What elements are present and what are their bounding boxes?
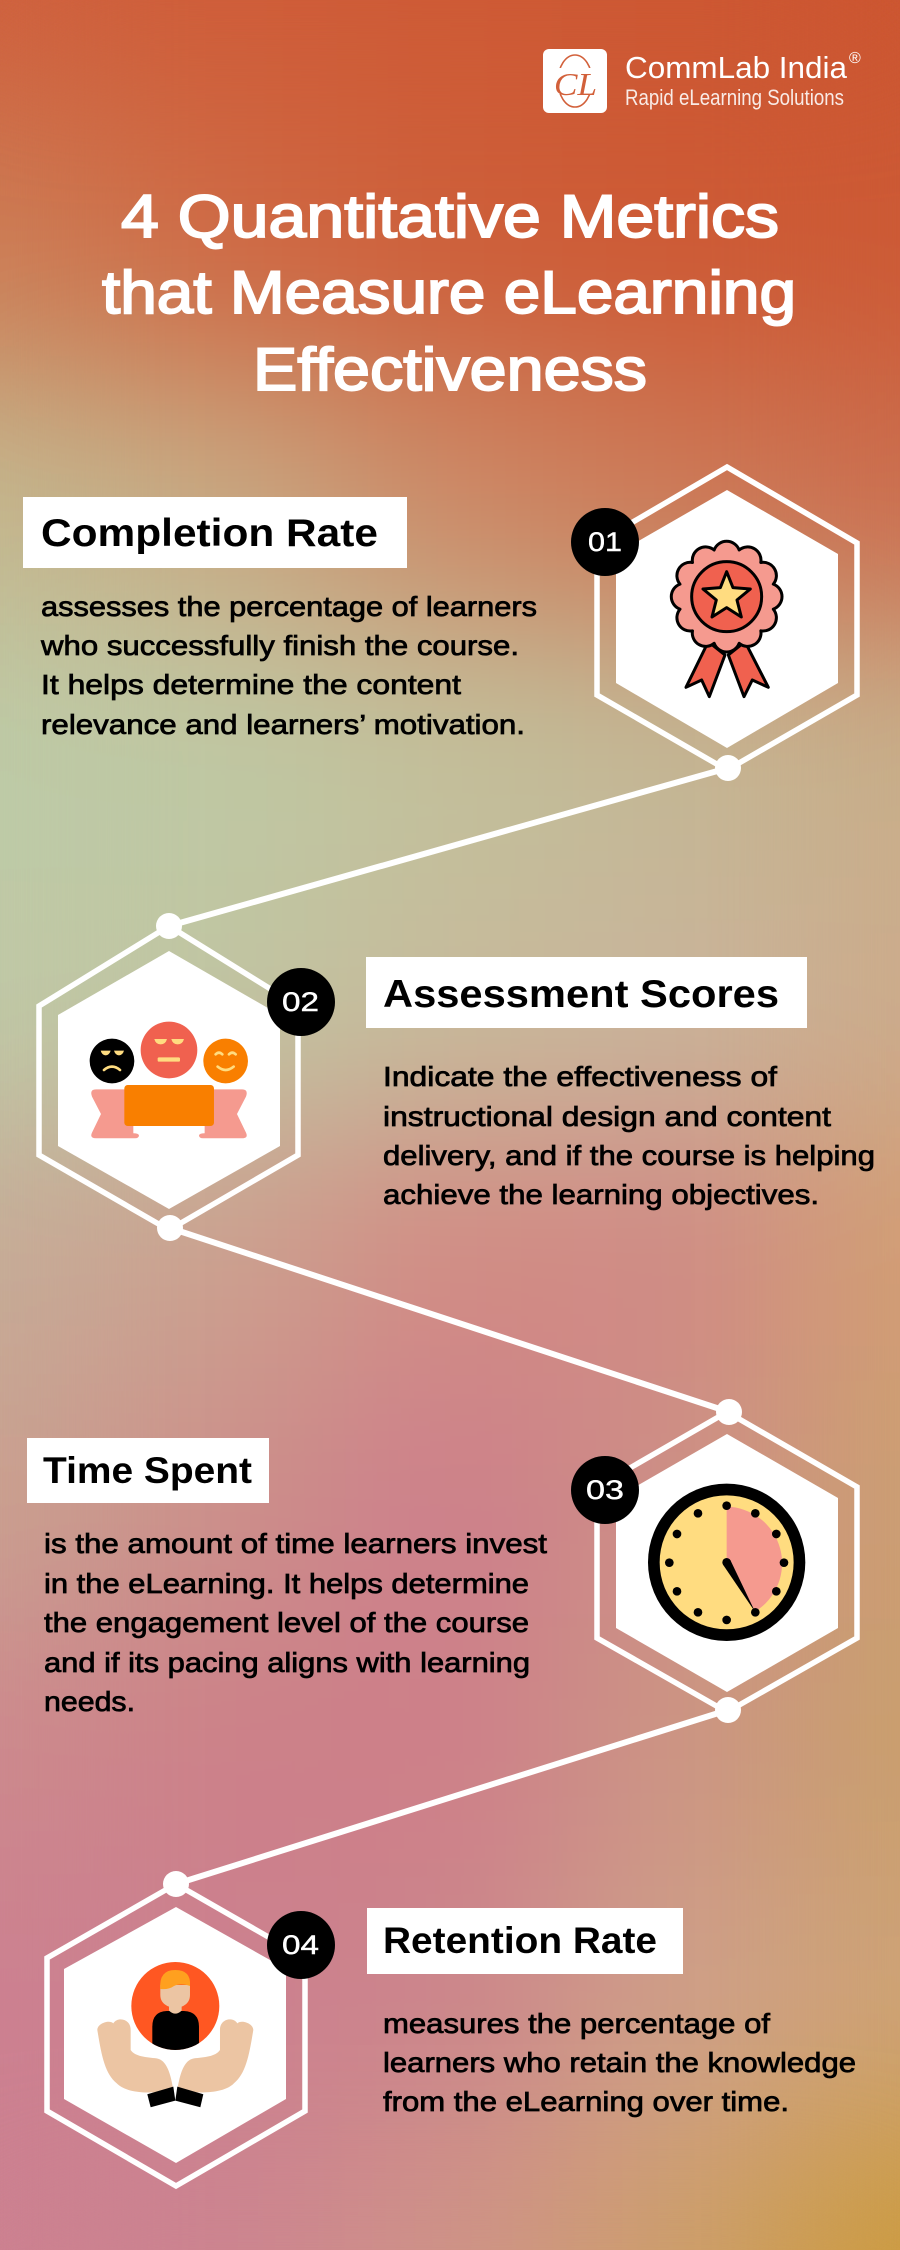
heading: retention rate: Retention Rate [383,1920,657,1961]
icon: hexagon with award rosette [597,467,857,781]
heading: time spent [27,1438,269,1503]
text: completion rate description: It helps determine the content [41,669,461,700]
title: 4 Quantitative Metrics [121,183,779,250]
title: Effectiveness [253,336,647,403]
text: assessment scores description: achieve the learning objectives. [383,1179,819,1210]
heading: retention rate [367,1908,683,1974]
text: completion rate description: who successfully finish the course. [40,630,519,661]
arrow: connector 2 to 3 [170,1228,729,1412]
badge: 02 [267,968,335,1036]
panel: assessment scores [39,913,875,1241]
text: time spent description: and if its pacing aligns with learning [44,1647,530,1678]
panel: completion rate [23,467,857,781]
logo tagline: Rapid eLearning Solutions [625,85,844,110]
badge: 03 [571,1456,639,1524]
heading: assessment scores: Assessment Scores [383,973,779,1016]
text: assessment scores description: instructional design and content [383,1101,831,1132]
badge: 04 [267,1911,335,1979]
text: assessment scores description [383,1061,875,1210]
icon: award rosette [671,541,782,697]
heading: completion rate [23,497,407,568]
text: retention rate description: measures the percentage of [383,2008,770,2039]
text: time spent description: in the eLearning. It helps determine [44,1568,529,1599]
text: completion rate description [40,591,537,740]
icon: CL logo mark: CL [554,66,597,102]
text: retention rate description: learners who retain the knowledge [383,2047,856,2078]
panel: time spent [27,1399,857,1723]
text: retention rate description: from the eLearning over time. [383,2086,789,2117]
arrow: connector 1 to 2 [169,768,728,926]
text: time spent description [44,1528,547,1717]
icon: CL logo mark [543,49,607,113]
badge: 04: 04 [282,1930,319,1960]
badge: 03: 03 [586,1475,624,1505]
icon: hexagon with person in hands [47,1871,305,2186]
icon: feedback faces on ribbon [90,1022,248,1138]
text: retention rate description [383,2008,856,2117]
badge: 01 [571,508,639,576]
text: time spent description: the engagement level of the course [44,1607,529,1638]
icon: hexagon with clock [597,1399,857,1723]
logo wordmark: CommLab India [625,50,848,85]
heading: completion rate: Completion Rate [41,512,378,555]
text: time spent description: needs. [44,1686,135,1717]
title [102,183,796,403]
arrow: connector 3 to 4 [176,1710,728,1884]
icon: hexagon with feedback faces [39,913,298,1241]
badge: 01: 01 [588,527,622,557]
heading: assessment scores [366,957,807,1028]
text: time spent description: is the amount of time learners invest [44,1528,547,1559]
registered mark: ® [849,50,861,67]
text: assessment scores description: Indicate the effectiveness of [383,1061,777,1092]
logo: CommLab India [543,49,861,113]
text: completion rate description: relevance and learners’ motivation. [41,709,525,740]
title: that Measure eLearning [102,259,796,326]
heading: time spent: Time Spent [43,1450,252,1491]
badge: 02: 02 [282,987,319,1017]
text: completion rate description: assesses the percentage of learners [41,591,537,622]
icon: person held in hands [97,1962,253,2107]
text: assessment scores description: delivery, and if the course is helping [383,1140,875,1171]
panel: retention rate [47,1871,856,2186]
icon: clock [648,1484,805,1641]
